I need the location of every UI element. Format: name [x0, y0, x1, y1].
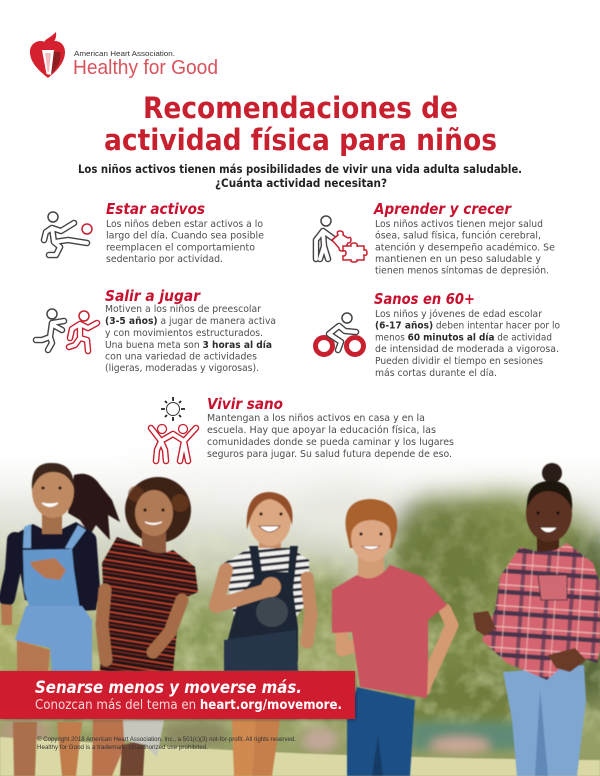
panel: Estar activos	[44, 200, 264, 265]
body text: sedentario por actividad.	[106, 254, 223, 265]
icon: child assembling puzzle	[316, 216, 367, 262]
body text: (6-17 años) deben intentar hacer por lo	[375, 320, 560, 332]
icon: sun and two children	[151, 397, 196, 461]
title	[104, 91, 497, 157]
body text: y con movimientos estructurados.	[105, 328, 263, 339]
heading: Vivir sano	[207, 395, 283, 413]
body text: (3-5 años) a jugar de manera activa	[105, 316, 276, 327]
children	[1, 463, 600, 776]
child 5: plaid shirt	[473, 463, 600, 776]
body text: ósea, salud física, función cerebral,	[375, 230, 541, 242]
body text: Pueden dividir el tiempo en sesiones	[375, 356, 543, 367]
body text: seguros para jugar. Su salud futura depende de eso.	[207, 449, 452, 460]
body text: escuela. Hay que apoyar la educación física, las	[207, 424, 436, 436]
body text: Mantengan a los niños activos en casa y en la	[207, 413, 425, 424]
body text: atención y desempeño académico. Se	[375, 242, 555, 254]
heading: Sanos en 60+	[374, 290, 475, 308]
panel: Sanos en 60+	[316, 290, 560, 379]
body text: de intensidad de moderada a vigorosa.	[375, 344, 559, 355]
panel: Aprender y crecer	[316, 200, 555, 276]
brand name: Healthy for Good	[73, 57, 218, 79]
title: Recomendaciones de	[143, 91, 458, 125]
heading: Estar activos	[106, 200, 205, 218]
background photo of running children	[0, 430, 600, 776]
body text: mantienen en un peso saludable y	[375, 254, 541, 265]
body text: Una buena meta son 3 horas al día	[105, 339, 272, 351]
panel: Vivir sano	[151, 395, 454, 461]
panel: Salir a jugar	[36, 287, 276, 374]
icon: heart and torch	[30, 32, 65, 78]
body text: reemplacen el comportamiento	[106, 242, 255, 254]
child 3: dark overalls	[216, 492, 311, 776]
body text: con una variedad de actividades	[105, 352, 257, 362]
body text: comunidades donde se pueda caminar y los lugares	[207, 437, 454, 448]
body text: tienen menos síntomas de depresión.	[375, 264, 549, 276]
body text: más cortas durante el día.	[375, 367, 497, 379]
body text: Motiven a los niños de preescolar	[105, 304, 262, 315]
body text: (ligeras, moderadas y vigorosas).	[105, 363, 259, 374]
child 2: striped shirt	[92, 477, 198, 776]
heading: Aprender y crecer	[373, 200, 512, 218]
subtitle	[78, 162, 522, 190]
icon: child riding bicycle	[316, 313, 364, 354]
body text	[105, 304, 276, 374]
banner link line: Conozcan más del tema en heart.org/movemore.	[35, 698, 342, 713]
body text: largo del día. Cuando sea posible	[106, 230, 264, 242]
park and sky backdrop	[0, 466, 600, 776]
heading: Salir a jugar	[105, 287, 201, 305]
body text: Los niños activos tienen mejor salud	[375, 219, 543, 230]
child 1: blue overalls	[1, 463, 120, 776]
copyright notice	[37, 736, 296, 751]
body text	[375, 308, 560, 379]
body text	[106, 219, 264, 265]
logo: American Heart Association Healthy for Good	[30, 32, 218, 79]
body text: Los niños y jóvenes de edad escolar	[375, 308, 543, 320]
child 4: pink shirt	[332, 499, 452, 776]
icon: two children running	[36, 309, 97, 351]
body text: Los niños deben estar activos a lo	[106, 219, 263, 230]
title: actividad física para niños	[104, 123, 497, 157]
body text: menos 60 minutos al día de actividad	[375, 332, 552, 344]
organization name: American Heart Association.	[74, 49, 175, 58]
body text	[375, 219, 555, 276]
body text	[207, 413, 454, 460]
copyright notice: © Copyright 2018 American Heart Association, Inc., a 501(c)(3) not-for-profit. All rights reserved.	[37, 736, 296, 743]
copyright notice: Healthy for Good is a trademark. Unauthorized use prohibited.	[37, 745, 208, 751]
banner headline: Senarse menos y moverse más.	[35, 678, 302, 697]
icon: child kicking a ball	[44, 212, 92, 255]
callout banner	[0, 671, 355, 719]
subtitle: Los niños activos tienen más posibilidades de vivir una vida adulta saludable.	[78, 162, 522, 176]
subtitle: ¿Cuánta actividad necesitan?	[215, 176, 387, 190]
